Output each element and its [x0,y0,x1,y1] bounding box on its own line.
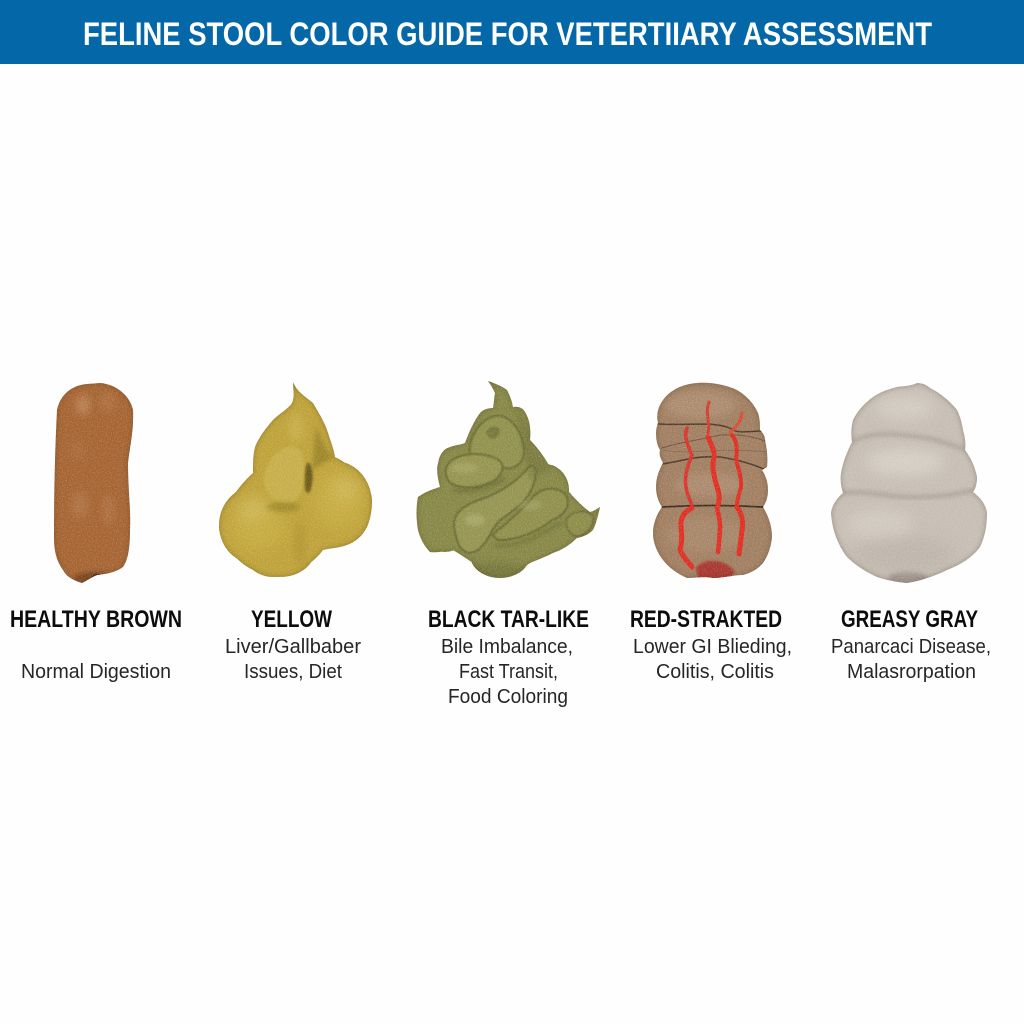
panel: yellow [219,382,372,680]
icon: brown log stool [54,383,134,583]
description: red-strakted: Colitis, Colitis [656,661,774,683]
description: red-strakted [633,636,792,683]
description: black tar-like: Fast Transit, [459,661,558,683]
description: yellow: Issues, Diet [244,661,342,683]
label: greasy gray: GREASY GRAY [841,606,978,633]
panel: healthy brown [10,375,182,683]
description: yellow: Liver/Gallbaber [225,636,361,658]
icon: pale gray lobed stool [831,383,987,583]
panel: greasy gray [831,383,990,682]
description: greasy gray: Panarcaci Disease, [831,636,991,658]
label: black tar-like: BLACK TAR-LIKE [428,606,589,633]
label: yellow: YELLOW [251,606,332,633]
icon: green coiled stool [416,381,600,578]
description: black tar-like: Food Coloring [448,686,568,708]
description: yellow [225,636,361,683]
description: healthy brown: Normal Digestion [21,661,171,683]
description: greasy gray [831,636,991,683]
label: healthy brown: HEALTHY BROWN [10,606,182,633]
icon: yellow lobed stool [219,382,372,577]
title banner [0,0,1024,64]
description: black tar-like [441,636,573,708]
panel: black tar-like [416,381,600,707]
icon: segmented stool with red streaks [653,382,772,578]
description: red-strakted: Lower GI Blieding, [633,636,792,658]
description: greasy gray: Malasrorpation [847,661,976,683]
label: red-strakted: RED-STRAKTED [630,606,782,633]
panel: red-streaked [630,375,792,683]
description: black tar-like: Bile Imbalance, [441,636,573,658]
